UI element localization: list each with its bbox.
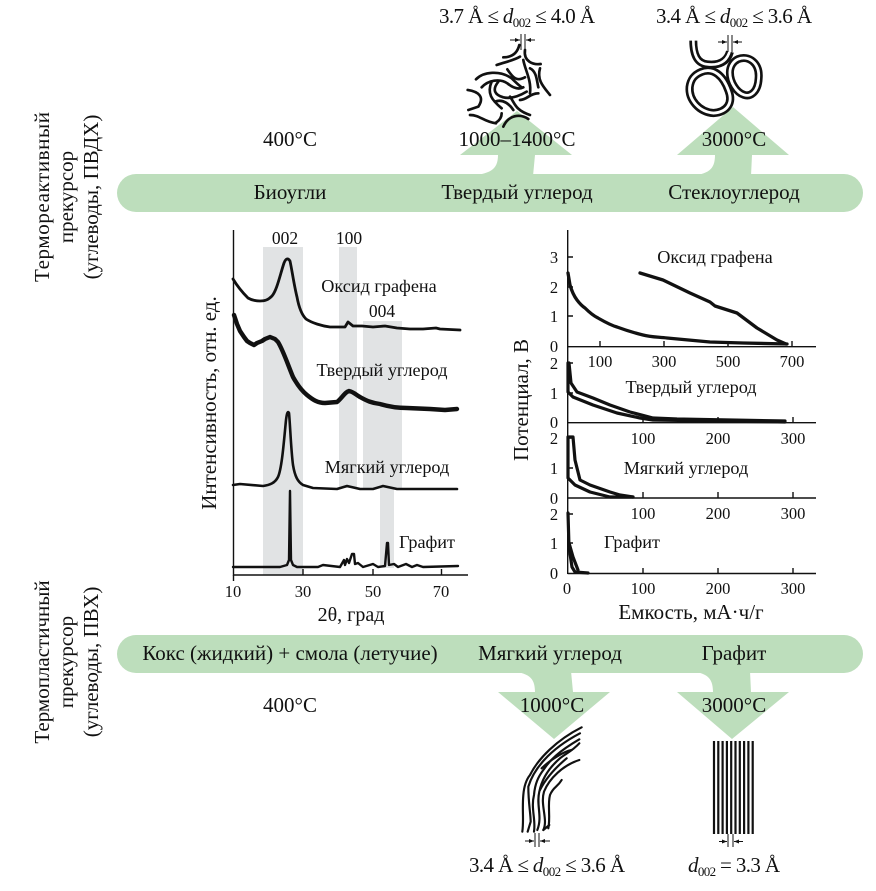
voltage chart labels: 300	[781, 579, 805, 598]
XRD labels: Интенсивность, отн. ед.	[197, 296, 221, 510]
XRD labels: 10	[225, 582, 241, 601]
XRD labels: Твердый углерод	[316, 360, 448, 380]
curve: soft carbon	[233, 412, 457, 489]
voltage chart labels: Потенциал, В	[509, 339, 533, 461]
icon: soft carbon layered structure	[522, 727, 582, 832]
bottom pathway labels: 3000°C	[702, 693, 766, 717]
XRD labels: Оксид графена	[321, 276, 437, 296]
XRD labels: 2θ, град	[318, 604, 384, 626]
XRD peak bands	[263, 247, 402, 575]
voltage chart labels: 0	[550, 413, 558, 432]
voltage chart labels: 0	[550, 489, 558, 508]
voltage chart labels: 3	[550, 248, 558, 267]
XRD labels: Графит	[399, 532, 455, 552]
voltage chart labels: 0	[550, 564, 558, 583]
voltage chart labels: 300	[781, 504, 805, 523]
panel: thermoset pathway arrow	[117, 107, 863, 212]
top pathway labels: 400°C	[263, 127, 317, 151]
chart: XRD patterns	[197, 228, 468, 626]
curves: graphene oxide	[568, 273, 787, 344]
formula: soft carbon spacing: ≤ 3.6 Å	[560, 853, 626, 877]
icon: graphite spacing marker	[719, 834, 743, 847]
voltage chart labels: 2	[550, 354, 558, 373]
voltage chart labels: Емкость, мА·ч/г	[618, 600, 764, 624]
voltage chart labels: 100	[631, 504, 655, 523]
voltage chart labels: 0	[563, 579, 571, 598]
formula: glassy carbon spacing: ≤ 3.6 Å	[747, 4, 813, 28]
curves: hard carbon	[568, 363, 785, 422]
voltage chart labels: 100	[631, 429, 655, 448]
icon: hard carbon disordered structure	[468, 45, 550, 127]
voltage chart labels: 500	[716, 352, 740, 371]
formula: soft carbon spacing: 3.4 Å ≤ d	[469, 853, 543, 877]
XRD labels: 50	[365, 582, 381, 601]
voltage chart labels: 200	[706, 504, 730, 523]
curve: graphite	[233, 491, 458, 567]
heading: thermoplastic precursor: прекурсор	[54, 616, 78, 708]
heading: thermoplastic precursor	[30, 580, 103, 744]
curves: graphite	[568, 513, 588, 573]
formula: hard carbon spacing: 3.7 Å ≤ d	[439, 4, 513, 28]
heading: thermoplastic precursor: Термопластичный	[30, 580, 54, 744]
voltage chart labels: 700	[780, 352, 804, 371]
heading: thermoset precursor	[30, 112, 103, 282]
bottom pathway labels: Мягкий углерод	[478, 641, 622, 665]
icon: soft carbon spacing marker	[525, 833, 550, 847]
voltage chart labels: 2	[550, 505, 558, 524]
heading: thermoplastic precursor: (углеводы, ПВХ)	[79, 587, 103, 737]
formula: hard carbon spacing: ≤ 4.0 Å	[530, 4, 596, 28]
voltage chart labels: 1	[550, 307, 558, 326]
panel: thermoplastic pathway arrow	[117, 635, 863, 739]
voltage chart labels: 0	[550, 337, 558, 356]
formula: hard carbon spacing: 002	[513, 15, 531, 30]
top pathway labels: Твердый углерод	[441, 180, 593, 204]
XRD labels: 70	[433, 582, 449, 601]
icon: graphite parallel layers	[714, 741, 753, 834]
top pathway labels: 1000–1400°C	[459, 127, 575, 151]
curve: hard carbon	[234, 315, 457, 410]
voltage chart labels: Оксид графена	[657, 247, 773, 267]
voltage chart labels	[509, 247, 805, 624]
voltage chart labels: 100	[631, 579, 655, 598]
formula: glassy carbon spacing: 002	[730, 15, 748, 30]
formula: graphite spacing: 002	[698, 864, 716, 879]
formula: graphite spacing: d	[688, 853, 699, 877]
bottom pathway labels	[142, 641, 766, 717]
top pathway labels: 3000°C	[702, 127, 766, 151]
icon: glassy carbon loops	[690, 39, 759, 113]
XRD labels: 004	[369, 301, 395, 321]
voltage chart labels: Графит	[604, 532, 660, 552]
voltage chart labels: Мягкий углерод	[624, 458, 748, 478]
voltage chart labels: 300	[781, 429, 805, 448]
top pathway labels: Стеклоуглерод	[668, 180, 800, 204]
top pathway labels: Биоугли	[254, 180, 326, 204]
heading: thermoset precursor: (углеводы, ПВДХ)	[79, 115, 103, 279]
formula: soft carbon spacing: 002	[543, 864, 561, 879]
chart: charge-discharge curves	[509, 230, 816, 624]
XRD labels: 30	[295, 582, 311, 601]
voltage chart labels: 200	[706, 429, 730, 448]
formula: graphite spacing: = 3.3 Å	[715, 853, 781, 877]
heading: thermoset precursor: прекурсор	[54, 151, 78, 243]
curve: graphene oxide	[233, 259, 460, 330]
icon: hard carbon spacing marker	[510, 34, 535, 50]
XRD labels: Мягкий углерод	[325, 457, 449, 477]
voltage chart labels: 1	[550, 534, 558, 553]
formula: glassy carbon spacing: 3.4 Å ≤ d	[656, 4, 730, 28]
bottom pathway labels: Графит	[702, 641, 766, 665]
bottom pathway labels: 1000°C	[520, 693, 584, 717]
heading: thermoset precursor: Термореактивный	[30, 112, 54, 282]
bottom pathway labels: 400°C	[263, 693, 317, 717]
voltage chart labels: 1	[550, 384, 558, 403]
voltage chart axes	[568, 230, 816, 574]
voltage chart labels: 2	[550, 278, 558, 297]
voltage chart labels: 2	[550, 429, 558, 448]
XRD axes	[234, 230, 468, 581]
voltage chart labels: 100	[588, 352, 612, 371]
voltage chart labels: 1	[550, 459, 558, 478]
voltage chart labels: 300	[652, 352, 676, 371]
voltage chart labels: 200	[706, 579, 730, 598]
XRD labels: 002	[272, 228, 298, 248]
top pathway labels	[254, 127, 800, 204]
XRD labels: 100	[336, 228, 362, 248]
bottom pathway labels: Кокс (жидкий) + смола (летучие)	[142, 641, 438, 665]
voltage chart labels: Твердый углерод	[625, 377, 757, 397]
XRD labels	[197, 228, 455, 626]
icon: glassy carbon spacing marker	[718, 35, 742, 52]
curves: soft carbon	[568, 437, 633, 497]
